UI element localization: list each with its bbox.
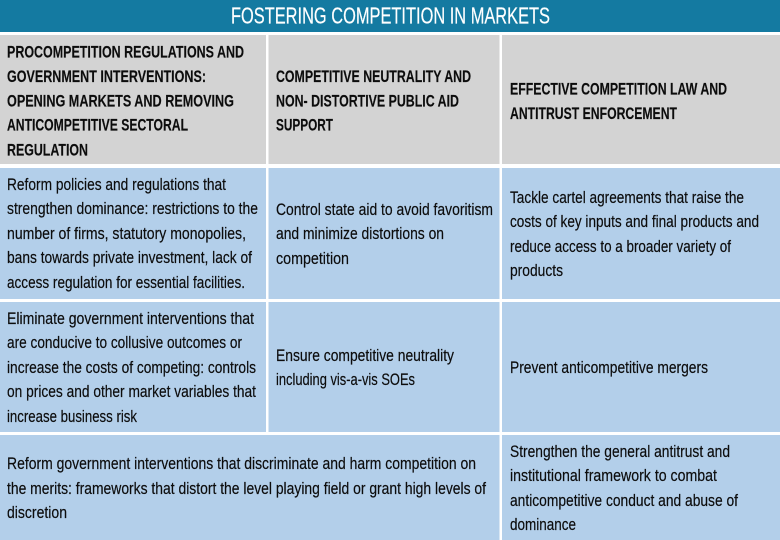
row 2 cell: ensure competitive neutrality: [268, 302, 500, 432]
row 3 cell: strengthen antitrust framework: institutional framework to combat: [510, 467, 717, 485]
row 2 cell: eliminate government interventions: are conducive to collusive outcomes or: [7, 334, 242, 352]
row 1 cell: control state aid: [268, 168, 500, 299]
row 1 cell: control state aid: and minimize distortions on: [276, 225, 444, 243]
row 1 cell: reform policies and regulations: bans towards private investment, lack of: [7, 249, 252, 267]
title banner: FOSTERING COMPETITION IN MARKETS: [231, 2, 550, 28]
row 1 cell: control state aid: competition: [276, 250, 349, 268]
row 2 cell: prevent mergers: Prevent anticompetitive mergers: [510, 359, 708, 377]
row 1 cell: reform policies and regulations: Reform policies and regulations that: [7, 176, 226, 194]
row 2 cell: eliminate government interventions: Eliminate government interventions that: [7, 310, 254, 328]
row 3 cell: strengthen antitrust framework: anticompetitive conduct and abuse of: [510, 492, 738, 510]
header cell: competitive neutrality: [268, 35, 500, 164]
header cell: procompetition regulations: [0, 35, 266, 164]
row 3 merged cell: reform government interventions: the merits: frameworks that distort the level playing field or grant high levels of: [7, 480, 486, 498]
header cell: procompetition regulations: GOVERNMENT INTERVENTIONS:: [7, 68, 206, 86]
row 2 cell: eliminate government interventions: [0, 302, 266, 432]
row 3 cell: strengthen antitrust framework: Strengthen the general antitrust and: [510, 443, 730, 461]
header cell: procompetition regulations: ANTICOMPETITIVE SECTORAL: [7, 116, 188, 134]
row 3 merged cell: reform government interventions: Reform government interventions that discriminate and harm competition on: [7, 455, 476, 473]
row 3 merged cell: reform government interventions: discretion: [7, 504, 67, 522]
title banner: [0, 0, 780, 32]
row 1 cell: tackle cartel agreements: products: [510, 262, 563, 280]
row 2 cell: ensure competitive neutrality: including vis-a-vis SOEs: [276, 371, 415, 389]
header cell: procompetition regulations: REGULATION: [7, 142, 88, 160]
header cell: effective competition law: ANTITRUST ENFORCEMENT: [510, 105, 677, 123]
header cell: effective competition law: [502, 35, 780, 164]
row 2 cell: ensure competitive neutrality: Ensure competitive neutrality: [276, 347, 455, 365]
header cell: competitive neutrality: NON- DISTORTIVE PUBLIC AID: [276, 92, 459, 110]
row 2 cell: eliminate government interventions: on prices and other market variables that: [7, 383, 256, 401]
row 2 cell: prevent mergers: [502, 302, 780, 432]
row 3 cell: strengthen antitrust framework: dominance: [510, 516, 576, 534]
header cell: competitive neutrality: COMPETITIVE NEUTRALITY AND: [276, 68, 471, 86]
row 1 cell: reform policies and regulations: [0, 168, 266, 299]
row 1 cell: control state aid: Control state aid to avoid favoritism: [276, 201, 493, 219]
row 1 cell: tackle cartel agreements: reduce access to a broader variety of: [510, 238, 731, 256]
row 2 cell: eliminate government interventions: increase the costs of competing: controls: [7, 359, 256, 377]
header cell: competitive neutrality: SUPPORT: [276, 116, 333, 134]
row 3 cell: strengthen antitrust framework: [502, 435, 780, 540]
header cell: procompetition regulations: PROCOMPETITION REGULATIONS AND: [7, 44, 244, 62]
header cell: procompetition regulations: OPENING MARKETS AND REMOVING: [7, 92, 234, 110]
row 1 cell: reform policies and regulations: access regulation for essential facilities.: [7, 274, 245, 292]
row 1 cell: reform policies and regulations: number of firms, statutory monopolies,: [7, 225, 246, 243]
row 3 merged cell: reform government interventions: [0, 435, 500, 540]
row 1 cell: tackle cartel agreements: [502, 168, 780, 299]
row 1 cell: reform policies and regulations: strengthen dominance: restrictions to the: [7, 200, 258, 218]
row 2 cell: eliminate government interventions: increase business risk: [7, 408, 138, 426]
